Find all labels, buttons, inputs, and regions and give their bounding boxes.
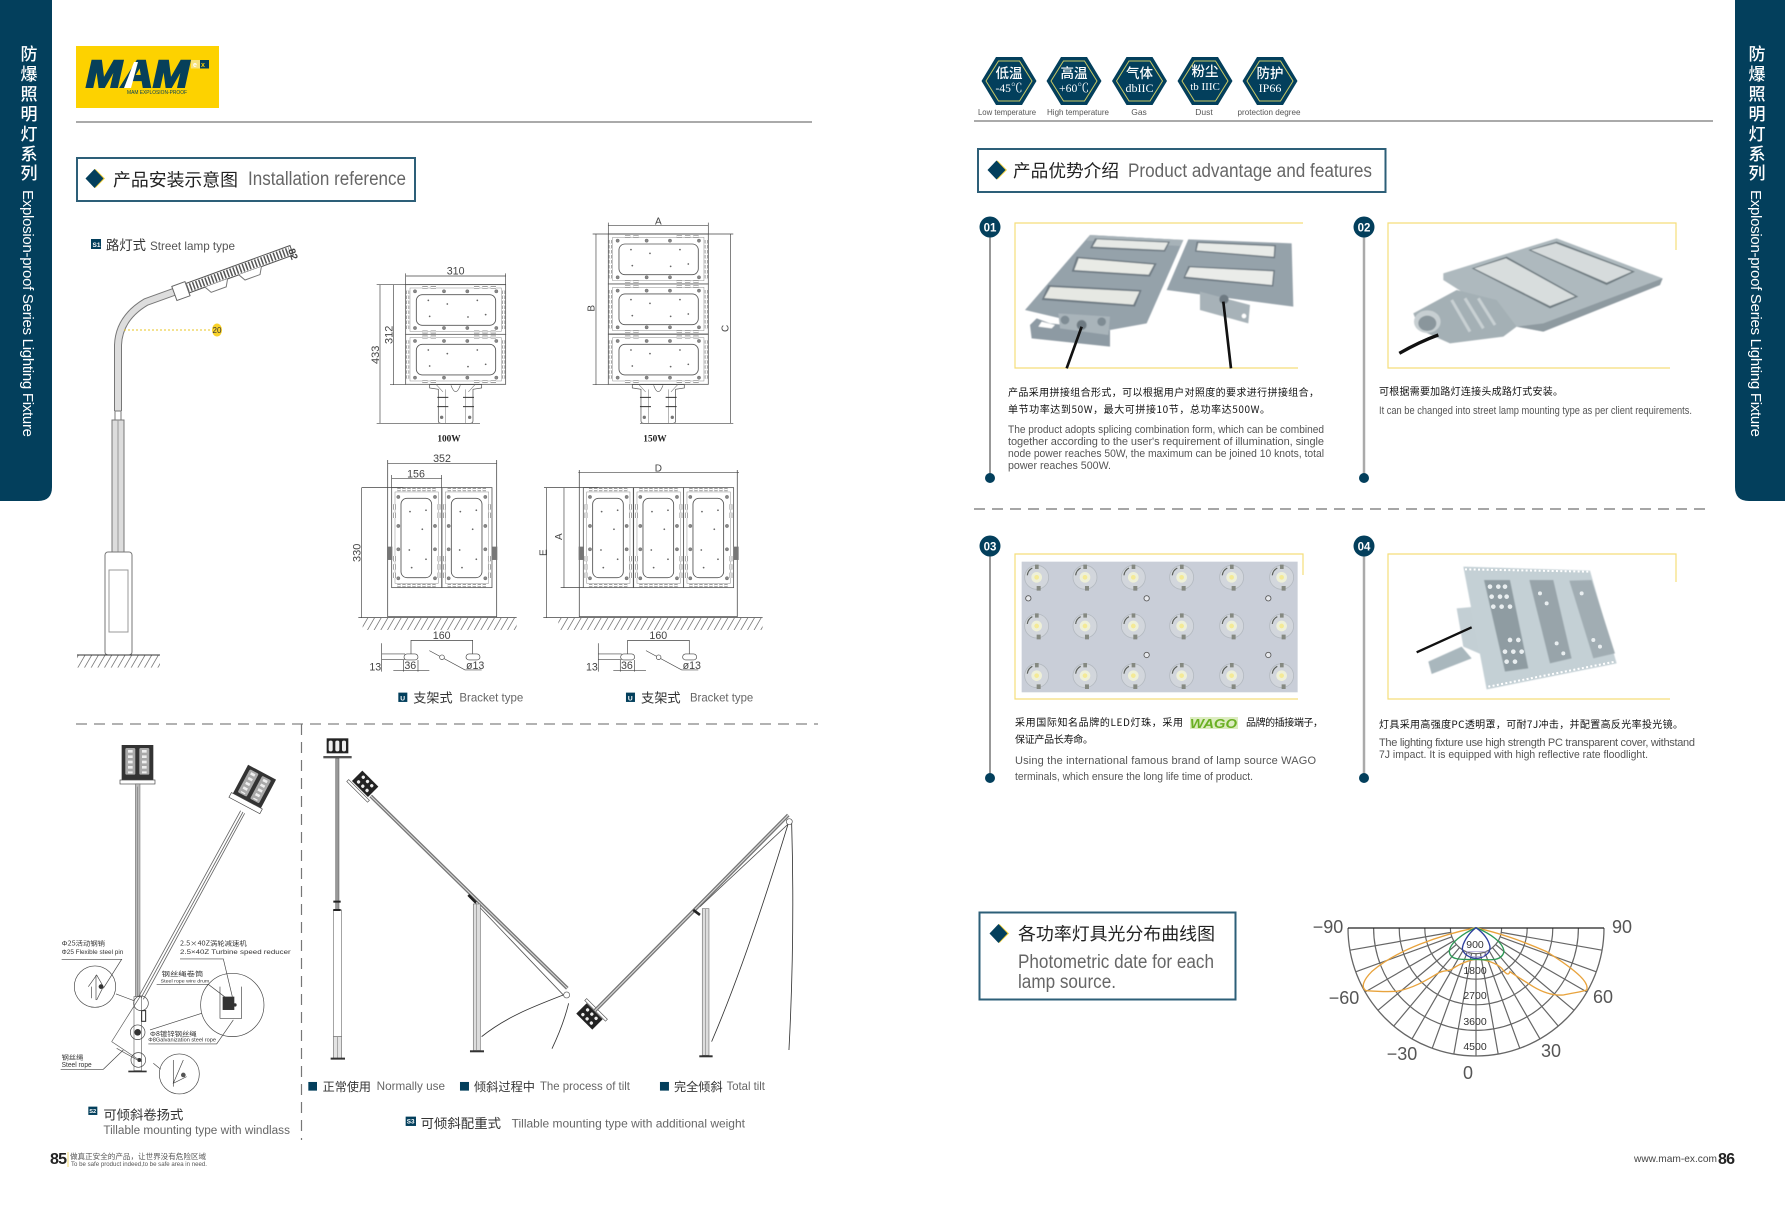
labels: bracket type	[398, 687, 753, 706]
certification badges: Gas	[1131, 107, 1147, 117]
bracket drawing: two modules	[351, 453, 517, 673]
bracket drawing: two modules: 36	[404, 660, 416, 672]
footer right: 86	[1718, 1151, 1735, 1168]
feature 03: 保证产品长寿命。	[1015, 731, 1093, 746]
street lamp drawing: 82	[285, 247, 299, 262]
bracket drawing: three modules: E	[539, 549, 550, 556]
legend: tilt stages: Total tilt	[727, 1080, 766, 1093]
feature 01: 01	[984, 222, 997, 234]
footer left: 做真正安全的产品，让世界没有危险区域	[70, 1151, 207, 1162]
polar light distribution chart: 1800	[1463, 965, 1487, 977]
certification badges	[978, 57, 1301, 117]
feature 04	[1354, 536, 1695, 783]
right side tab: 系	[1748, 140, 1766, 165]
polar light distribution chart: 900	[1466, 939, 1484, 951]
polar light distribution chart: 2700	[1463, 990, 1487, 1002]
dimension drawing: 100W: 310	[447, 266, 465, 278]
left side tab	[0, 0, 52, 501]
heading: photometric data: Photometric date for each	[1018, 952, 1214, 973]
bracket drawing: two modules: 156	[407, 468, 425, 480]
certification badges: protection degree	[1238, 107, 1301, 117]
polar light distribution chart: −30	[1387, 1044, 1417, 1064]
certification badges: High temperature	[1047, 107, 1109, 117]
label: street lamp type: 路灯式	[106, 234, 146, 254]
bracket drawing: two modules: 352	[433, 453, 451, 465]
dimension drawing: 100W: 433	[370, 346, 382, 364]
right side tab: 照	[1748, 80, 1766, 105]
logo: e	[193, 62, 197, 69]
windlass mounting diagram: 钢丝绳卷筒	[162, 969, 203, 978]
badge: gas: dbIIC	[1126, 81, 1154, 95]
heading: photometric data: 各功率灯具光分布曲线图	[1018, 921, 1215, 946]
polar light distribution chart: 30	[1541, 1041, 1561, 1061]
photo: LED board	[1022, 562, 1298, 692]
certification badges: Dust	[1195, 107, 1213, 117]
right side tab	[1735, 0, 1785, 501]
bracket drawing: three modules: A	[554, 533, 565, 540]
feature 01: together according to the user's requirement of illumination, single	[1008, 436, 1324, 448]
label: windlass mounting type	[88, 1104, 290, 1137]
polar light distribution chart: 4500	[1463, 1041, 1487, 1053]
photo: floodlight	[1417, 567, 1617, 689]
feature 03	[980, 536, 1323, 783]
badge: high temperature: 高温	[1060, 62, 1088, 82]
feature 04: The lighting fixture use high strength PC transparent cover, withstand	[1379, 737, 1695, 749]
bracket drawing: three modules: 160	[649, 630, 667, 642]
windlass mounting diagram: Steel rope wire drum	[161, 978, 209, 984]
legend: tilt stages: Normally use	[377, 1080, 445, 1093]
legend: tilt stages: 正常使用	[323, 1078, 371, 1095]
labels: bracket type: 支架式	[641, 687, 681, 706]
left side tab: 系	[20, 140, 38, 165]
labels: bracket type: U	[628, 695, 633, 702]
heading: product advantages: 产品优势介绍	[1013, 158, 1119, 183]
bracket drawing: two modules: 13	[369, 661, 381, 673]
polar light distribution chart	[1313, 917, 1632, 1083]
left side tab: 列	[20, 159, 38, 184]
badge: dust: tb IIIC	[1190, 81, 1220, 93]
bracket drawing: two modules: 160	[433, 630, 451, 642]
badge: low temperature: -45℃	[996, 81, 1022, 95]
dimension drawing: 150W: A	[655, 217, 662, 228]
badge: protection: IP66	[1259, 81, 1281, 95]
photo: street lamp luminaire	[1399, 238, 1663, 353]
left side tab: 爆	[20, 60, 38, 85]
right side tab: Explosion-proof Series Lighting Fixture	[1747, 190, 1764, 437]
feature 01: The product adopts splicing combination form, which can be combined	[1008, 424, 1324, 436]
bracket drawing: three modules: 36	[621, 660, 633, 672]
feature 03: 03	[984, 542, 996, 554]
badge: dust: 粉尘	[1192, 60, 1218, 80]
footer right	[1633, 1151, 1735, 1168]
feature 01: 产品采用拼接组合形式，可以根据用户对照度的要求进行拼接组合，	[1008, 384, 1319, 399]
legend: tilt stages: The process of tilt	[540, 1080, 631, 1093]
polar light distribution chart: −60	[1329, 988, 1359, 1008]
right side tab: 明	[1748, 100, 1766, 125]
labels: bracket type: 支架式	[413, 687, 453, 706]
feature 02: It can be changed into street lamp mounting type as per client requirements.	[1379, 405, 1692, 417]
windlass mounting diagram: Φ25 Flexible steel pin	[62, 949, 124, 956]
badge: gas: 气体	[1126, 62, 1153, 82]
logo: x	[201, 62, 205, 69]
heading: photometric data: lamp source.	[1018, 972, 1116, 993]
label: windlass mounting type: S2	[89, 1109, 96, 1115]
bracket drawing: two modules: 330	[351, 544, 363, 562]
badge: gas	[1112, 57, 1167, 105]
label: street lamp type	[91, 234, 235, 254]
right side tab: 防	[1748, 40, 1766, 65]
feature 04: 灯具采用高强度PC透明罩，可耐7J冲击，并配置高反光率投光镜。	[1379, 716, 1683, 731]
feature 02: 可根据需要加路灯连接头成路灯式安装。	[1379, 383, 1563, 398]
left side tab: 照	[20, 80, 38, 105]
labels: bracket type: U	[400, 695, 405, 702]
label: additional weight mounting type: 可倾斜配重式	[421, 1113, 501, 1132]
badge: low temperature	[982, 57, 1036, 105]
bracket drawing: two modules: ø13	[466, 660, 484, 672]
dimension drawing: 150W: C	[721, 325, 732, 332]
label: additional weight mounting type	[406, 1113, 746, 1132]
left side tab: 明	[20, 100, 38, 125]
legend: tilt stages: 完全倾斜	[674, 1078, 723, 1095]
feature 04: 7J impact. It is equipped with high reflective rate floodlight.	[1379, 749, 1648, 761]
windlass mounting diagram: 2.5×40Z涡轮减速机	[180, 938, 247, 947]
feature 03: terminals, which ensure the long life time of product.	[1015, 771, 1253, 783]
feature 01: node power reaches 50W, the maximum can be joined 10 knots, total	[1008, 448, 1324, 460]
logo: MAM	[86, 54, 191, 96]
windlass mounting diagram	[61, 745, 291, 1094]
badge: dust	[1178, 57, 1232, 105]
logo	[76, 46, 219, 108]
dimension drawing: 100W	[370, 266, 506, 444]
polar light distribution chart: 0	[1463, 1063, 1473, 1083]
windlass mounting diagram: Φ8镀锌钢丝绳	[150, 1029, 197, 1038]
bracket drawing: three modules: ø13	[683, 660, 701, 672]
windlass mounting diagram: Φ8Galvanization steel rope	[148, 1038, 216, 1044]
right side tab: 列	[1748, 159, 1766, 184]
heading: product advantages	[978, 149, 1386, 192]
label: additional weight mounting type: S3	[407, 1119, 415, 1126]
dimension drawing: 100W: 100W	[437, 434, 461, 444]
badge: protection: 防护	[1256, 62, 1284, 82]
bracket drawing: three modules: 13	[586, 661, 598, 673]
heading: installation reference	[77, 158, 415, 201]
street lamp drawing	[77, 244, 299, 668]
icon: WAGO logo: WAGO	[1190, 716, 1237, 731]
labels: bracket type: Bracket type	[459, 691, 523, 704]
polar light distribution chart: 3600	[1463, 1016, 1487, 1028]
dimension drawing: 150W: B	[587, 305, 598, 312]
label: street lamp type: S1	[92, 242, 101, 249]
bracket drawing: three modules	[539, 463, 763, 673]
left side tab: 防	[20, 40, 38, 65]
legend: tilt stages	[308, 1078, 766, 1095]
feature 01	[980, 216, 1324, 483]
label: windlass mounting type: Tillable mounting type with windlass	[103, 1123, 290, 1137]
feature 02	[1354, 216, 1692, 483]
labels: bracket type: Bracket type	[690, 691, 753, 704]
dimension drawing: 100W: 312	[383, 326, 395, 344]
heading: product advantages: Product advantage and features	[1128, 161, 1372, 182]
windlass mounting diagram: Steel rope	[62, 1060, 92, 1069]
right side tab: 灯	[1748, 120, 1766, 145]
label: additional weight mounting type: Tillable mounting type with additional weight	[512, 1118, 746, 1131]
left side tab: Explosion-proof Series Lighting Fixture	[19, 190, 36, 437]
polar light distribution chart: 60	[1593, 987, 1613, 1007]
heading: installation reference: Installation reference	[248, 169, 406, 190]
photo: combined luminaires	[1025, 235, 1293, 368]
windlass mounting diagram: 钢丝绳	[62, 1052, 84, 1061]
windlass mounting diagram: 2.5×40Z Turbine speed reducer	[180, 949, 291, 956]
badge: low temperature: 低温	[996, 62, 1023, 82]
feature 03: 采用国际知名品牌的LED灯珠，采用	[1015, 714, 1183, 729]
certification badges: Low temperature	[978, 107, 1036, 117]
street lamp drawing: 20	[213, 326, 222, 335]
logo: MAM EXPLOSION-PROOF	[127, 90, 187, 96]
label: windlass mounting type: 可倾斜卷扬式	[103, 1104, 183, 1123]
feature 01: 单节功率达到50W，最大可拼接10节，总功率达500W。	[1008, 401, 1270, 416]
feature 01: power reaches 500W.	[1008, 460, 1111, 472]
heading: installation reference: 产品安装示意图	[113, 167, 238, 192]
badge: protection	[1242, 57, 1298, 105]
footer left	[50, 1151, 207, 1168]
label: street lamp type: Street lamp type	[150, 239, 235, 253]
windlass mounting diagram: Φ25活动钢销	[62, 938, 106, 947]
badge: high temperature: +60℃	[1059, 81, 1089, 95]
feature 02: 02	[1358, 222, 1370, 234]
footer right: www.mam-ex.com	[1633, 1153, 1717, 1165]
badge: high temperature	[1046, 57, 1102, 105]
bracket drawing: three modules: D	[655, 463, 662, 474]
heading: photometric data	[980, 912, 1236, 1000]
footer left: 85	[50, 1151, 67, 1168]
dimension drawing: 150W	[587, 217, 733, 444]
dimension drawing: 150W: 150W	[643, 434, 667, 444]
right side tab: 爆	[1748, 60, 1766, 85]
feature 03: Using the international famous brand of lamp source WAGO	[1015, 755, 1316, 767]
polar light distribution chart: −90	[1313, 917, 1343, 937]
legend: tilt stages: 倾斜过程中	[474, 1078, 535, 1095]
footer left: To be safe product indeed,to be safe area in need.	[71, 1162, 207, 1168]
polar light distribution chart: 90	[1612, 917, 1632, 937]
feature 04: 04	[1358, 542, 1371, 554]
additional weight mounting diagram	[323, 738, 793, 1060]
feature 03: 品牌的插接端子，	[1246, 714, 1323, 729]
left side tab: 灯	[20, 120, 38, 145]
